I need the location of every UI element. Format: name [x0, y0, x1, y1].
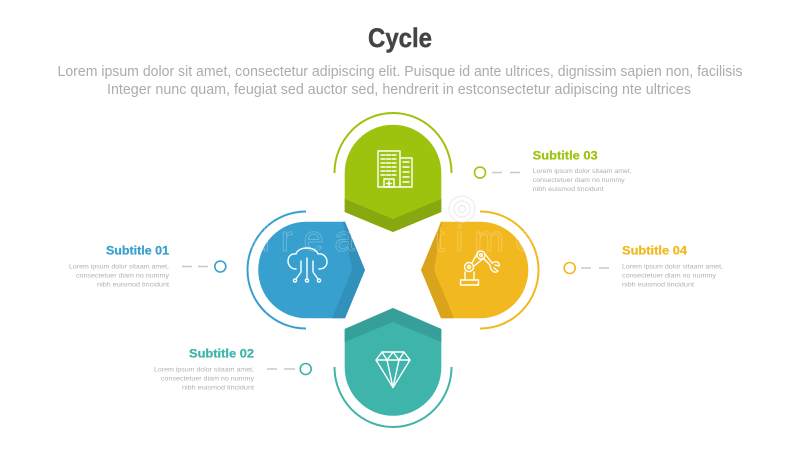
- callout: subtitle 03: Lorem ipsum dolor sitaam amet,: [533, 168, 632, 175]
- callout: subtitle 02: nibh euismod tincidunt: [182, 384, 254, 392]
- watermark: [250, 196, 535, 259]
- callout: subtitle 02: consectetuer diam no nummy: [161, 376, 255, 382]
- callout: subtitle 01: nibh euismod tincidunt: [97, 282, 169, 288]
- panel: teal petal: [334, 308, 452, 427]
- callout: subtitle 02: Lorem ipsum dolor sitaam amet,: [154, 366, 254, 374]
- callout: subtitle 03: Subtitle 03: [533, 148, 598, 162]
- callout: subtitle 01: [69, 244, 226, 288]
- intro text: [58, 64, 742, 98]
- icon: buildings: [378, 151, 412, 187]
- panel: yellow petal: [421, 212, 538, 329]
- icon: cloud network: [288, 248, 327, 282]
- watermark: dreamstime: [250, 218, 535, 259]
- panel: green petal: [334, 113, 452, 232]
- callout: subtitle 03: [474, 148, 632, 193]
- callout: subtitle 03: consectetuer diam no nummy: [533, 177, 625, 184]
- icon: diamond: [376, 352, 410, 388]
- intro text: Integer nunc quam, feugiat sed auctor sed, hendrerit in estconsectetur adipiscing nte ultrices: [107, 82, 691, 98]
- icon: robot arm: [460, 251, 499, 285]
- callout: subtitle 02: [154, 346, 311, 392]
- callout: subtitle 04: consectetuer diam no nummy: [622, 272, 717, 280]
- callout: subtitle 03: nibh euismod tincidunt: [533, 186, 604, 193]
- callout: subtitle 01: Lorem ipsum dolor sitaam amet,: [69, 264, 169, 270]
- title: Cycle: [368, 23, 432, 53]
- callout: subtitle 01: Subtitle 01: [106, 244, 169, 258]
- panel: blue petal: [248, 212, 365, 329]
- callout: subtitle 04: Lorem ipsum dolor sitaam amet,: [622, 264, 723, 270]
- callout: subtitle 04: [564, 244, 723, 288]
- callout: subtitle 01: consectetuer diam no nummy: [76, 272, 170, 280]
- callout: subtitle 02: Subtitle 02: [189, 346, 254, 360]
- callout: subtitle 04: Subtitle 04: [622, 244, 687, 258]
- callout: subtitle 04: nibh euismod tincidunt: [622, 282, 694, 288]
- intro text: Lorem ipsum dolor sit amet, consectetur adipiscing elit. Puisque id ante ultrices, dignissim sapien non, facilisis: [58, 64, 742, 80]
